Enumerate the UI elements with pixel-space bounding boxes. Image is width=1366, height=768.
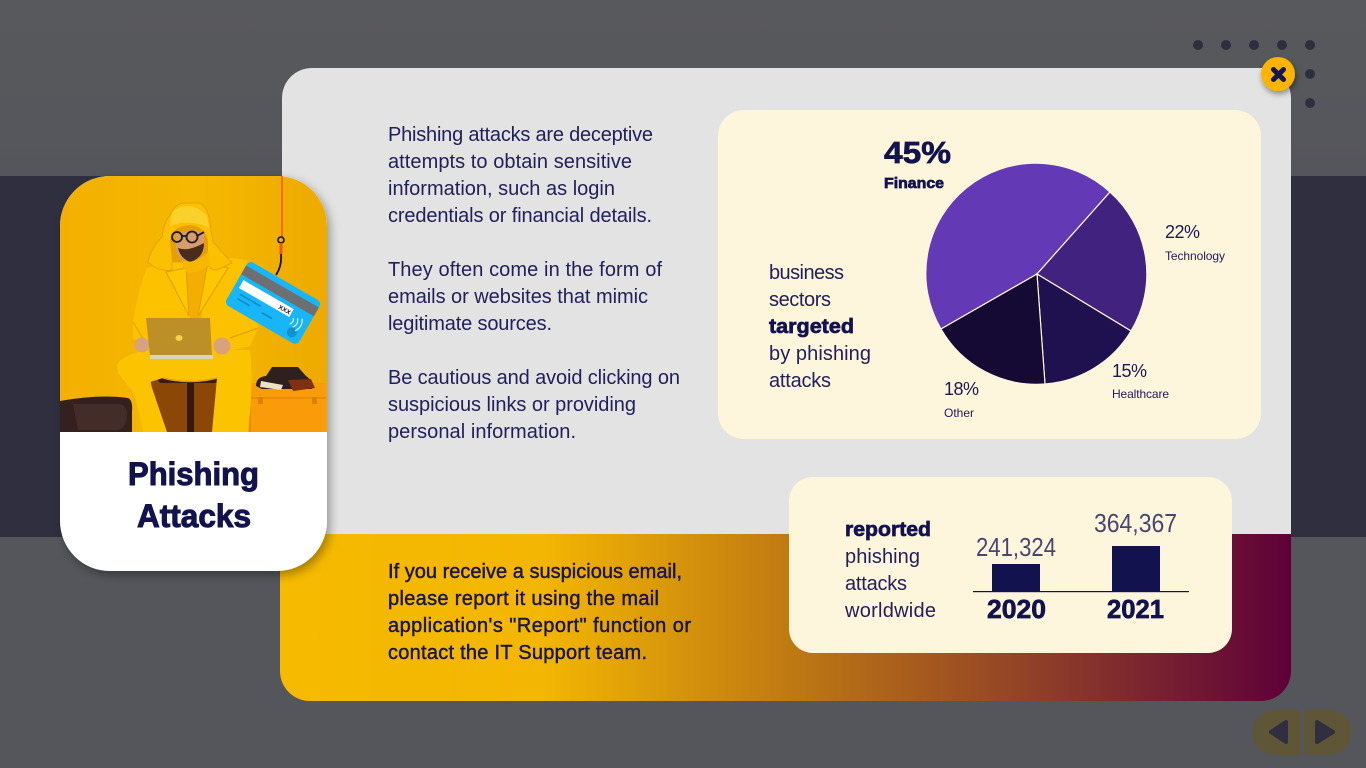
- icon: previous arrow: [1271, 722, 1286, 742]
- pie caption: attacks: [769, 370, 831, 392]
- glasses: [172, 232, 204, 242]
- label: other: [944, 379, 979, 420]
- inner sweater and lapels: [183, 266, 208, 318]
- bar chart: 2021: [1107, 594, 1164, 624]
- panel: title card: [60, 176, 327, 571]
- bar chart caption: [844, 519, 936, 622]
- bar chart: 364,367: [1094, 508, 1177, 538]
- label: technology: 22%: [1165, 222, 1200, 242]
- left bag: [60, 397, 132, 432]
- report instructions text: [388, 561, 691, 664]
- bar chart: [973, 508, 1189, 624]
- stool: [150, 378, 217, 432]
- intro text: [388, 124, 680, 443]
- report instructions text: application's "Report" function or: [388, 615, 691, 637]
- icon: next arrow: [1317, 722, 1333, 742]
- decorative dot grid: [1193, 40, 1315, 108]
- label: technology: Technology: [1165, 249, 1225, 263]
- label: other: 18%: [944, 379, 979, 399]
- legs: [117, 350, 252, 432]
- report instructions text: If you receive a suspicious email,: [388, 561, 682, 583]
- icon: credit card: [224, 260, 322, 346]
- label: finance: [884, 135, 951, 192]
- label: other: Other: [944, 406, 974, 420]
- items on case: [256, 367, 315, 391]
- pie caption: sectors: [769, 289, 831, 311]
- label: healthcare: Healthcare: [1112, 387, 1169, 401]
- intro text: Phishing attacks are deceptive: [388, 124, 653, 146]
- panel: reported attacks bar chart: [789, 477, 1232, 653]
- laptop: [146, 318, 213, 359]
- intro text: credentials or financial details.: [388, 205, 652, 227]
- icon: fishing hook and line: [276, 176, 284, 275]
- illustration: man in yellow with laptop: [60, 176, 327, 432]
- report instructions text: contact the IT Support team.: [388, 642, 647, 664]
- label: finance: Finance: [884, 175, 944, 192]
- collar: [182, 252, 210, 272]
- bar chart caption: worldwide: [844, 600, 936, 622]
- bar chart caption: phishing: [845, 546, 920, 568]
- intro text: suspicious links or providing: [388, 394, 636, 416]
- bottom gradient strip: [280, 534, 1291, 701]
- label: healthcare: 15%: [1112, 361, 1147, 381]
- intro text: legitimate sources.: [388, 313, 552, 335]
- bar chart: 2020: [987, 594, 1046, 624]
- intro text: personal information.: [388, 421, 576, 443]
- intro text: emails or websites that mimic: [388, 286, 648, 308]
- navigation arrows: [1252, 710, 1352, 755]
- bar chart caption: attacks: [845, 573, 907, 595]
- label: finance: 45%: [884, 135, 951, 170]
- close button: [1261, 57, 1295, 91]
- panel: business sectors pie chart: [718, 110, 1261, 439]
- intro text: They often come in the form of: [388, 259, 662, 281]
- orange case: [247, 383, 326, 432]
- bar chart: 241,324: [976, 532, 1056, 562]
- card title: [128, 456, 259, 534]
- icon: credit card: XXX: [277, 305, 291, 316]
- bar chart caption: reported: [845, 519, 931, 541]
- main panel: [282, 68, 1291, 534]
- hands: [134, 338, 230, 354]
- face: [176, 230, 204, 262]
- pie caption: business: [769, 262, 844, 284]
- card title: Phishing: [128, 456, 259, 492]
- intro text: Be cautious and avoid clicking on: [388, 367, 680, 389]
- intro text: attempts to obtain sensitive: [388, 151, 632, 173]
- pie caption: [769, 262, 871, 392]
- hood: [148, 203, 232, 270]
- pie caption: by phishing: [769, 343, 871, 365]
- report instructions text: please report it using the mail: [388, 588, 659, 610]
- intro text: information, such as login: [388, 178, 615, 200]
- card title: Attacks: [137, 498, 251, 534]
- label: healthcare: [1112, 361, 1169, 401]
- pie caption: targeted: [769, 316, 854, 338]
- coat: [133, 258, 258, 352]
- label: technology: [1165, 222, 1225, 263]
- pie chart: [926, 163, 1147, 384]
